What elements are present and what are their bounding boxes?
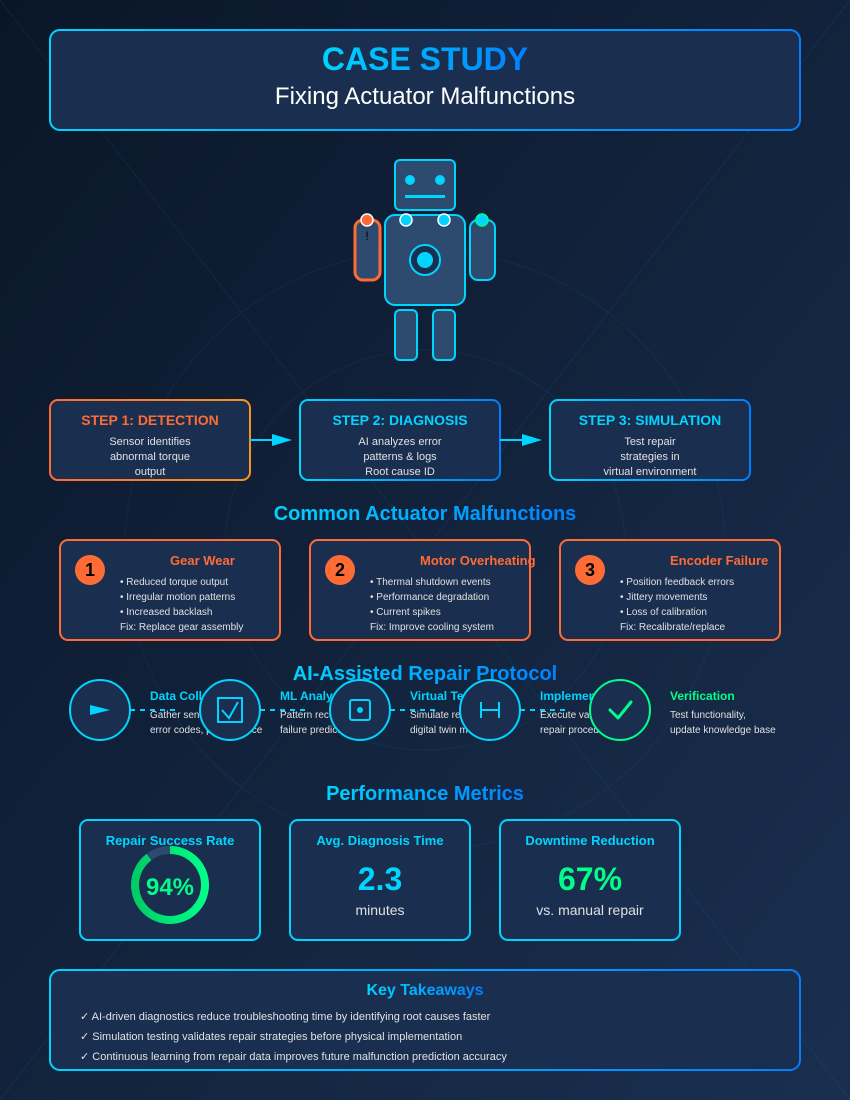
step 1: detection [50, 400, 250, 480]
malfunction card: encoder failure: • Loss of calibration [620, 607, 707, 618]
protocol step: virtual testing [330, 680, 493, 740]
step 2: diagnosis: STEP 2: DIAGNOSIS [332, 412, 468, 428]
protocol step: verification [590, 680, 776, 740]
malfunction card: motor overheating: • Thermal shutdown events [370, 577, 491, 588]
step 2: diagnosis: AI analyzes error [358, 436, 442, 448]
title: CASE STUDY [322, 41, 528, 77]
malfunction card: encoder failure: 3 [585, 560, 595, 580]
key takeaways panel: ✓ AI-driven diagnostics reduce troubleshooting time by identifying root causes faster [80, 1011, 491, 1023]
header panel [50, 30, 800, 130]
step 3: simulation: STEP 3: SIMULATION [579, 412, 721, 428]
metric: average diagnosis time: Avg. Diagnosis Time [316, 833, 444, 848]
malfunction card: gear wear [60, 540, 280, 640]
step 3: simulation: strategies in [620, 451, 680, 463]
arrow: step 2 to step 3 [500, 434, 542, 446]
protocol step: data collection [70, 680, 263, 740]
protocol step: virtual testing: digital twin model [410, 725, 487, 736]
protocol step: verification: update knowledge base [670, 725, 776, 736]
malfunction card: motor overheating: Fix: Improve cooling system [370, 622, 494, 633]
protocol step: implementation [460, 680, 629, 740]
malfunction card: motor overheating: • Current spikes [370, 607, 441, 618]
key takeaways panel: ✓ Simulation testing validates repair strategies before physical implementation [80, 1031, 462, 1043]
key takeaways panel: ✓ Continuous learning from repair data improves future malfunction prediction accuracy [80, 1051, 507, 1063]
protocol step: verification: Verification [670, 689, 735, 703]
robot legs [395, 310, 455, 360]
metric: repair success rate: Repair Success Rate [106, 833, 234, 848]
subtitle: Fixing Actuator Malfunctions [275, 83, 575, 110]
robot head [395, 160, 455, 210]
protocol step: data collection: Gather sensor data, [150, 710, 238, 721]
protocol step: virtual testing: Virtual Testing [410, 689, 492, 703]
malfunction card: encoder failure: • Position feedback errors [620, 577, 734, 588]
malfunction card: encoder failure: Encoder Failure [670, 553, 768, 568]
protocol step: data collection: Data Collection [150, 689, 237, 703]
step 3: simulation: virtual environment [604, 466, 696, 478]
malfunction card: encoder failure: Fix: Recalibrate/replace [620, 622, 725, 633]
malfunction card: motor overheating [310, 540, 536, 640]
key takeaways panel [50, 970, 800, 1070]
malfunction card: gear wear: • Increased backlash [120, 607, 212, 618]
malfunction card: gear wear: 1 [85, 560, 95, 580]
step 1: detection: abnormal torque [110, 451, 190, 463]
malfunctioning left arm: ! [365, 229, 369, 243]
malfunction card: motor overheating: Motor Overheating [420, 553, 536, 568]
step 2: diagnosis: Root cause ID [365, 466, 435, 478]
shoulder joints [400, 214, 450, 226]
malfunction card: gear wear: • Reduced torque output [120, 577, 228, 588]
protocol step: ml analysis [200, 680, 367, 740]
metric: average diagnosis time [290, 820, 470, 940]
arrow: step 1 to step 2 [250, 434, 292, 446]
metric: downtime reduction: Downtime Reduction [525, 833, 655, 848]
step 2: diagnosis: patterns & logs [363, 451, 437, 463]
malfunction card: encoder failure [560, 540, 780, 640]
metric: downtime reduction: 67% [558, 861, 622, 897]
malfunction card: encoder failure: • Jittery movements [620, 592, 707, 603]
step 1: detection: Sensor identifies [109, 436, 191, 448]
step 3: simulation [550, 400, 750, 480]
key takeaways panel: Key Takeaways [366, 982, 484, 999]
heading: performance metrics: Performance Metrics [326, 783, 524, 805]
right arm [470, 214, 495, 280]
robot illustration [355, 160, 495, 360]
protocol step: virtual testing: Simulate repairs in [410, 710, 493, 721]
step 1: detection: output [135, 466, 165, 478]
metric: downtime reduction [500, 820, 680, 940]
metric: average diagnosis time: 2.3 [358, 861, 402, 897]
heading: common malfunctions: Common Actuator Malfunctions [274, 503, 576, 525]
protocol step: verification: Test functionality, [670, 710, 746, 721]
protocol step: implementation: repair procedure [540, 725, 614, 736]
malfunction card: motor overheating: 2 [335, 560, 345, 580]
step 3: simulation: Test repair [624, 436, 676, 448]
protocol step: implementation: Execute validated [540, 710, 619, 721]
metric: average diagnosis time: minutes [355, 902, 405, 918]
malfunction card: gear wear: Gear Wear [170, 553, 235, 568]
protocol step: data collection: error codes, performance [150, 725, 263, 736]
malfunctioning left arm [355, 214, 380, 280]
protocol step: implementation: Implementation [540, 689, 629, 703]
metric: repair success rate [80, 820, 260, 940]
malfunction card: gear wear: • Irregular motion patterns [120, 592, 235, 603]
step 1: detection: STEP 1: DETECTION [81, 412, 219, 428]
metric: downtime reduction: vs. manual repair [536, 902, 644, 918]
protocol step: ml analysis: failure prediction [280, 725, 353, 736]
metric: repair success rate: 94% [146, 874, 194, 901]
protocol step: ml analysis: Pattern recognition, [280, 710, 367, 721]
heading: repair protocol: AI-Assisted Repair Protocol [293, 663, 557, 685]
progress ring [135, 850, 205, 920]
malfunction card: motor overheating: • Performance degradation [370, 592, 489, 603]
robot body [385, 215, 465, 305]
malfunction card: gear wear: Fix: Replace gear assembly [120, 622, 243, 633]
protocol step: ml analysis: ML Analysis [280, 689, 350, 703]
step 2: diagnosis [300, 400, 500, 480]
